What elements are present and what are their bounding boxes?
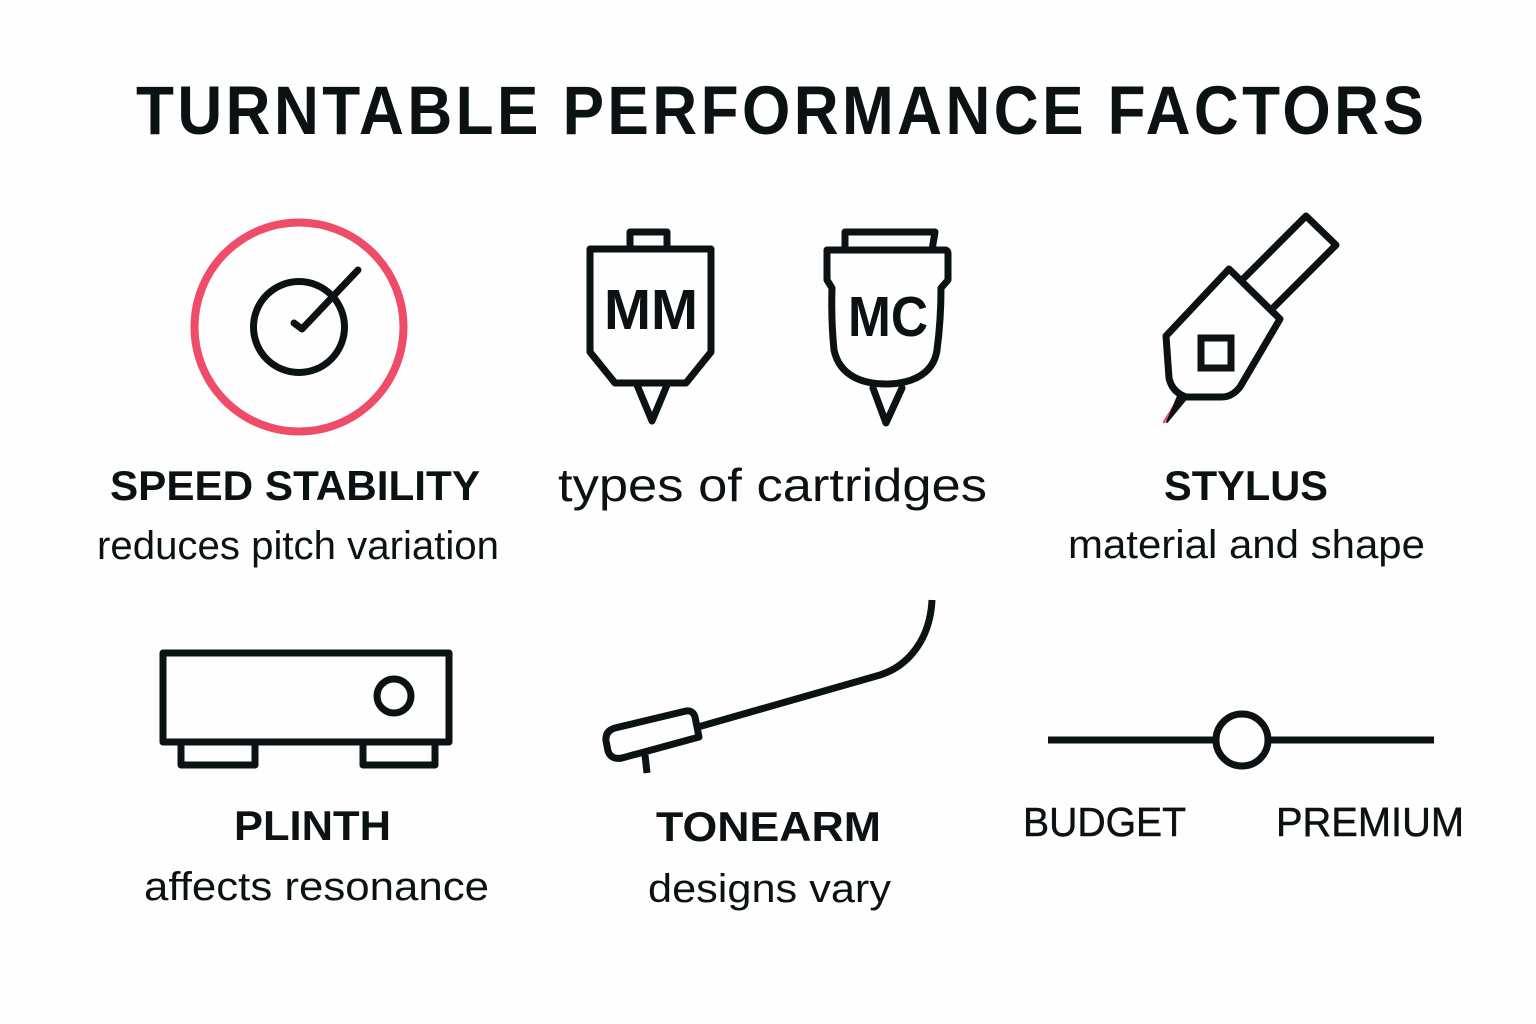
icon: MC cartridge xyxy=(827,232,948,423)
panel: stylus xyxy=(1068,216,1425,567)
label: premium: PREMIUM xyxy=(1276,799,1464,845)
text: speed stability caption: reduces pitch variation xyxy=(97,524,499,568)
icon: slider xyxy=(1048,714,1434,766)
heading: tonearm: TONEARM xyxy=(656,803,881,850)
heading: plinth: PLINTH xyxy=(234,802,391,849)
icon: tonearm xyxy=(606,600,932,773)
icon: MM cartridge: MM xyxy=(604,278,698,342)
panel: tonearm xyxy=(606,600,932,911)
text: stylus caption: material and shape xyxy=(1068,523,1425,567)
icon: stylus xyxy=(1164,216,1336,422)
label: budget: BUDGET xyxy=(1023,799,1186,845)
text: types of cartridges: types of cartridges xyxy=(558,459,987,511)
icon: MM cartridge xyxy=(590,232,711,421)
panel: cartridges xyxy=(558,232,987,511)
heading: stylus: STYLUS xyxy=(1164,462,1328,509)
text: tonearm caption: designs vary xyxy=(648,867,891,911)
icon: gauge in red ring xyxy=(194,222,404,432)
title: TURNTABLE PERFORMANCE FACTORS xyxy=(136,72,1424,149)
panel: plinth xyxy=(144,653,489,909)
icon: MC cartridge: MC xyxy=(848,285,928,349)
heading: speed stability: SPEED STABILITY xyxy=(110,462,480,509)
text: plinth caption: affects resonance xyxy=(144,865,489,909)
panel: speed stability xyxy=(97,222,499,568)
panel: price slider xyxy=(1023,714,1464,845)
icon: plinth xyxy=(163,653,449,765)
